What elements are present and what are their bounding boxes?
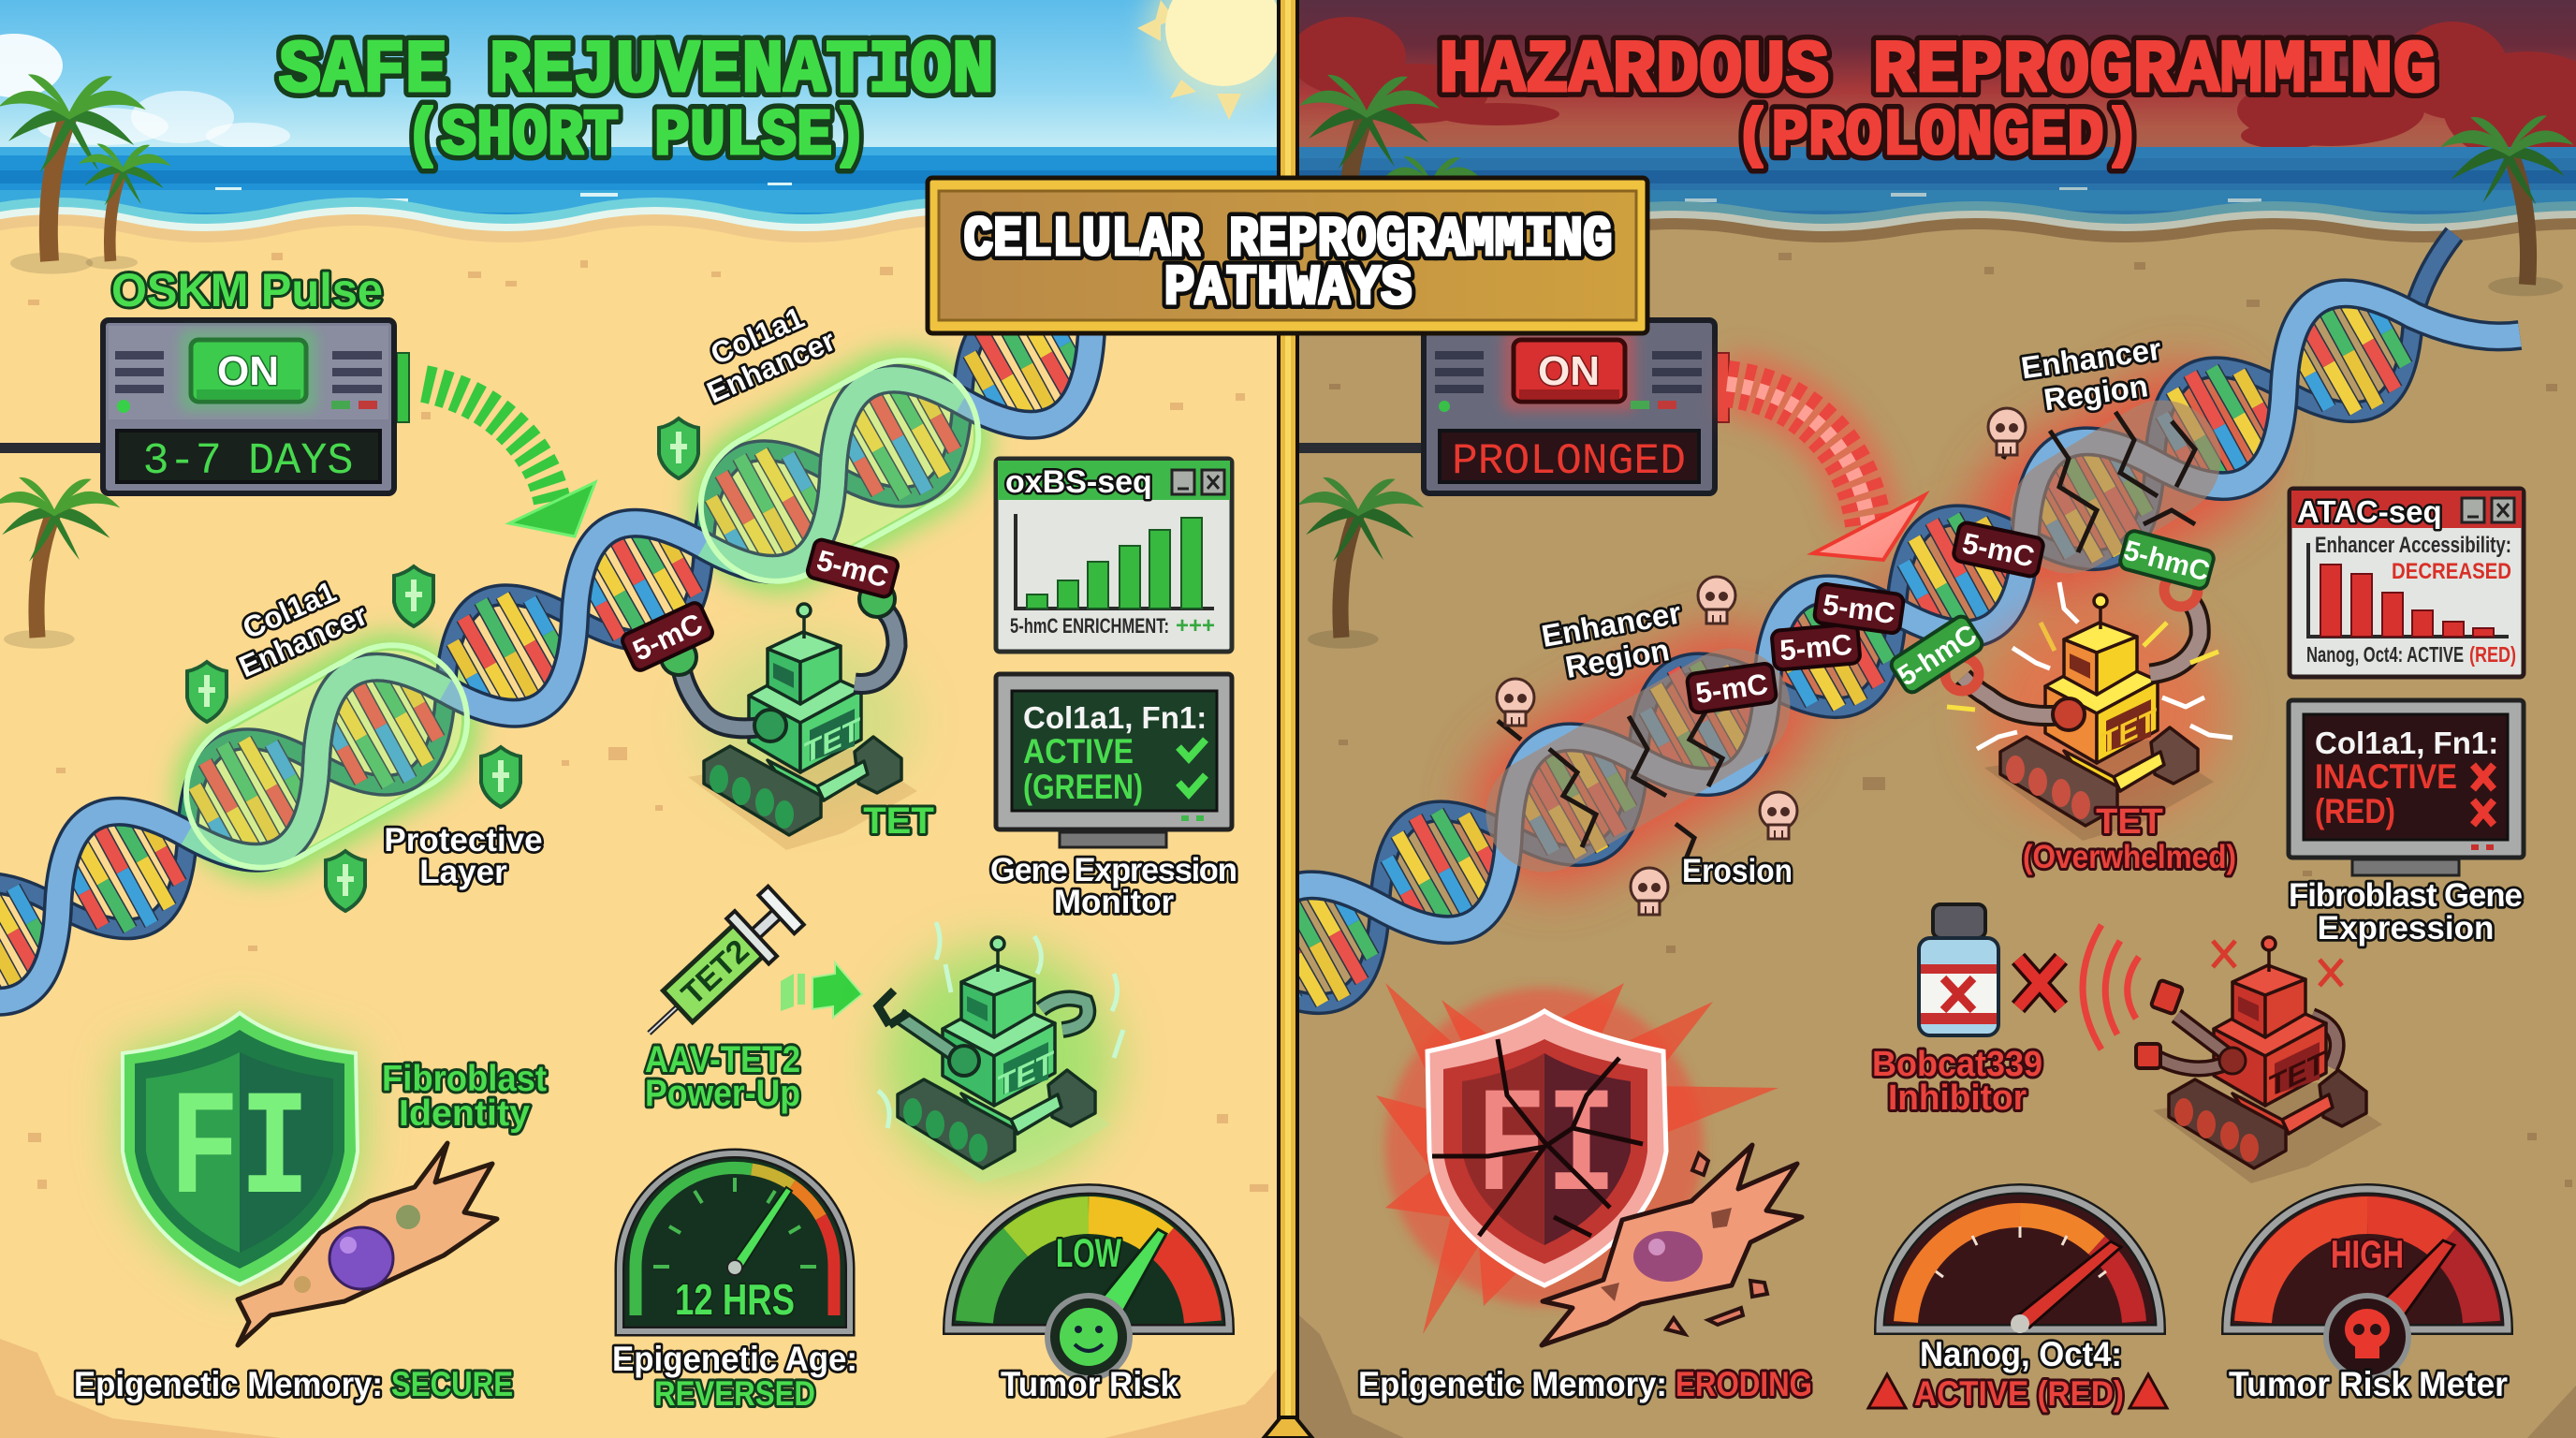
gauge: epigenetic age 12 hrs (620, 1153, 850, 1331)
bar chart: enhancer accessibility (2308, 543, 2509, 637)
label: Nanog Oct4 ACTIVE RED: ACTIVE (RED) (1914, 1374, 2124, 1413)
glow: erosion and stress (1554, 449, 2181, 807)
label: Epigenetic Memory ERODING: Epigenetic Memory: (1358, 1365, 1667, 1403)
title: hazardous reprogramming: (PROLONGED) (1734, 100, 2141, 174)
icon: broken fibroblast identity shield: FI (1476, 1064, 1617, 1235)
label: Epigenetic Age REVERSED (612, 1340, 857, 1413)
arrow: green power-up (781, 962, 862, 1018)
tag: 5-mC left: 5-mC (628, 607, 708, 668)
icon: Bobcat339 bottle (1919, 904, 1998, 1035)
banner: cellular reprogramming pathways (928, 178, 1647, 333)
label: Fibroblast Identity: Fibroblast (382, 1059, 547, 1099)
tag: 5-mC stack 4: 5-mC (1959, 526, 2037, 574)
button: ON: ON (217, 348, 279, 394)
icon: fibroblast identity shield: FI (169, 1067, 310, 1238)
label: Col1a1 Enhancer upper: Col1a1 (706, 301, 809, 371)
label: Epigenetic Memory ERODING: ERODING (1676, 1365, 1812, 1403)
label: Col1a1 Enhancer lower: Enhancer (234, 597, 373, 683)
label: Enhancer Region lower: Enhancer (1539, 594, 1684, 653)
burst rays (1385, 988, 1704, 1306)
label: Bobcat339 Inhibitor: Bobcat339 (1872, 1045, 2042, 1084)
label: Fibroblast Identity: Identity (399, 1093, 530, 1134)
label: Enhancer Region lower (1539, 594, 1690, 687)
display: PROLONGED: PROLONGED (1452, 437, 1686, 486)
title: safe rejuvenation (279, 29, 994, 174)
label: Fibroblast Gene Expression (2289, 877, 2523, 946)
label: Epigenetic Memory SECURE: SECURE (391, 1365, 513, 1403)
icon: fibroblast identity shield (123, 1013, 358, 1284)
icon: healthy fibroblast cell (238, 1143, 497, 1345)
arm: left (681, 663, 770, 728)
icon: smiley (1047, 1296, 1130, 1378)
window: ATAC-seq chart (2290, 489, 2524, 677)
icon: palm tree upper left (1299, 75, 1440, 265)
centre divider (1264, 0, 1312, 1438)
icon: power cord left (0, 443, 103, 453)
label: Epigenetic Memory SECURE: Epigenetic Memory: (74, 1365, 383, 1403)
label: Col1a1 Enhancer lower (220, 566, 373, 683)
banner: cellular reprogramming pathways: CELLULAR REPROGRAMMING (964, 209, 1612, 272)
icon: AAV-TET2 syringe: TET2 (675, 933, 756, 1012)
button: ON red (1502, 330, 1636, 412)
label: Protective Layer: Layer (419, 854, 507, 890)
window: ATAC-seq chart: (RED) (2469, 642, 2516, 667)
tag: 5-mC stack 1: 5-mC (1693, 668, 1770, 710)
gauge: epigenetic age 12 hrs: 12 HRS (675, 1275, 795, 1324)
label: Col1a1 Enhancer upper (688, 292, 841, 409)
gauge: tumor risk high (2227, 1189, 2508, 1378)
robot: TET inhibited: TET (2269, 1044, 2326, 1105)
label: Enhancer Region upper: Enhancer (2019, 331, 2163, 385)
label: Protective Layer: Protective (384, 822, 543, 858)
title: safe rejuvenation: (SHORT PULSE) (405, 100, 868, 174)
monitor: fibroblast gene expression (2289, 700, 2524, 875)
glow: capsule halos (262, 435, 903, 793)
icon: warning triangle right (2130, 1374, 2167, 1408)
label: Fibroblast Identity (382, 1059, 547, 1134)
icon: palm tree lower (1297, 477, 1424, 649)
bar chart: 5-hmC enrichment (1016, 514, 1214, 609)
title: hazardous reprogramming (1439, 29, 2437, 174)
icons: small protective shields (187, 418, 698, 911)
arm: right (855, 610, 897, 683)
label: Enhancer Region upper: Region (2042, 368, 2150, 417)
gauge: tumor risk low (948, 1189, 1229, 1378)
label: OSKM Pulse: OSKM Pulse (111, 264, 383, 316)
device: prolonged timer (1424, 320, 1729, 493)
capsule: protective layer upper (698, 358, 981, 584)
label: Erosion: Erosion (1682, 853, 1793, 889)
icon: palm tree 1 (0, 74, 146, 274)
panel: hazardous reprogramming beach background (1290, 0, 2576, 1438)
label: TET Overwhelmed: TET (2096, 802, 2163, 842)
icon: palm tree small (1384, 156, 1483, 289)
icon: power cord right (1299, 443, 1424, 453)
label: Protective Layer (384, 822, 543, 890)
monitor: gene expression (996, 674, 1232, 847)
icon: sun (1137, 0, 1300, 120)
arrow: green pulse (424, 384, 595, 536)
tag: 5-mC right: 5-mC (813, 544, 892, 594)
window: ATAC-seq chart: Enhancer Accessibility: (2315, 533, 2511, 558)
label: Col1a1 Enhancer lower: Col1a1 (238, 575, 341, 645)
title: safe rejuvenation: SAFE REJUVENATION (279, 29, 994, 114)
label: AAV-TET2 Power-Up: AAV-TET2 (645, 1039, 800, 1080)
button: ON (180, 330, 317, 412)
window: ATAC-seq chart: ATAC-seq (2297, 494, 2442, 529)
capsule: protective layer lower (183, 642, 470, 871)
icon: broken fibroblast identity shield (1376, 983, 1778, 1334)
label: Epigenetic Age REVERSED: Epigenetic Age: (612, 1340, 857, 1378)
label: Nanog Oct4 ACTIVE RED: Nanog, Oct4: (1920, 1335, 2122, 1373)
icon: inhibition waves (2083, 925, 2139, 1049)
label: Gene Expression Monitor (990, 852, 1237, 920)
gauge: tumor risk high: HIGH (2331, 1232, 2404, 1276)
label: Nanog Oct4 ACTIVE RED (1868, 1335, 2167, 1413)
window: ATAC-seq chart: DECREASED (2392, 559, 2511, 584)
window: oxBS-seq chart: +++ (1176, 613, 1215, 638)
icons: skulls (1497, 408, 2026, 915)
erosion overlay lower (1498, 674, 1732, 861)
title: hazardous reprogramming: HAZARDOUS REPROGRAMMING (1439, 29, 2437, 114)
tag: 5-mC stack 2: 5-mC (1778, 628, 1853, 667)
tag: 5-hmC right: 5-hmC (2120, 535, 2213, 587)
tag: 5-hmC left: 5-hmC (1893, 619, 1983, 693)
icon: eroding fibroblast cell (1542, 1145, 1802, 1345)
display: 3-7 days: 3-7 DAYS (142, 437, 354, 487)
window: ATAC-seq chart: Nanog, Oct4: ACTIVE (2306, 642, 2464, 667)
label: Fibroblast Gene Expression: Expression (2318, 910, 2494, 946)
icon: AAV-TET2 syringe (628, 883, 807, 1056)
icon: red clouds (1290, 17, 2576, 164)
panel: safe rejuvenation beach background (0, 0, 1329, 1438)
robot: TET powered up (878, 922, 1123, 1183)
button: ON red: ON (1538, 348, 1600, 394)
robot: TET overwhelmed: TET (2100, 701, 2158, 762)
monitor: fibroblast gene expression: (RED) (2315, 792, 2395, 830)
icon: warning triangle left (1868, 1374, 1906, 1408)
capsule interiors (262, 435, 903, 793)
chart: right DNA helix with erosion (1251, 234, 2520, 1004)
monitor: gene expression: (GREEN) (1023, 768, 1143, 806)
cracks (1432, 1039, 1643, 1236)
robot: TET overwhelmed (1945, 573, 2232, 841)
label: Enhancer Region lower: Region (1562, 632, 1672, 684)
tag: 5-mC stack 3: 5-mC (1821, 588, 1897, 630)
label: TET: TET (863, 800, 934, 842)
robot: TET inhibited (2136, 937, 2382, 1183)
icon: clouds (0, 34, 290, 149)
monitor: fibroblast gene expression: Col1a1, Fn1: (2315, 726, 2498, 760)
label: Bobcat339 Inhibitor: Inhibitor (1888, 1078, 2027, 1118)
robot: TET green: TET (804, 711, 861, 771)
gauge: Nanog Oct4 (1880, 1189, 2160, 1333)
icon: palm tree 3 (0, 477, 120, 649)
device: OSKM pulse timer (103, 320, 409, 493)
gauge: tumor risk low: LOW (1056, 1231, 1121, 1276)
label: Col1a1 Enhancer upper: Enhancer (702, 323, 841, 409)
sparks (1947, 582, 2232, 749)
label: TET Overwhelmed: (Overwhelmed) (2023, 839, 2236, 875)
robot: TET green (661, 581, 917, 850)
label: Epigenetic Age REVERSED: REVERSED (654, 1374, 815, 1413)
robot: TET powered up: TET (998, 1044, 1055, 1105)
icon: palm tree far right (2440, 115, 2573, 296)
label: AAV-TET2 Power-Up: Power-Up (645, 1073, 800, 1114)
label: Tumor Risk Meter: Tumor Risk Meter (2229, 1365, 2508, 1403)
label: Gene Expression Monitor: Gene Expression (990, 852, 1237, 888)
monitor: fibroblast gene expression: INACTIVE (2315, 757, 2457, 796)
banner: cellular reprogramming pathways: PATHWAYS (1164, 257, 1412, 321)
icon: palm tree 2 (79, 144, 171, 270)
label: Tumor Risk: Tumor Risk (1001, 1365, 1178, 1403)
window: oxBS-seq chart: 5-hmC ENRICHMENT: (1010, 614, 1169, 638)
label: Fibroblast Gene Expression: Fibroblast Gene (2289, 877, 2523, 914)
monitor: gene expression: Col1a1, Fn1: (1023, 700, 1207, 735)
label: AAV-TET2 Power-Up (645, 1039, 800, 1114)
label: Bobcat339 Inhibitor (1872, 1045, 2042, 1118)
label: Gene Expression Monitor: Monitor (1054, 884, 1175, 920)
icon: skull dial (2326, 1296, 2408, 1378)
label: TET Overwhelmed (2023, 802, 2236, 875)
arrow: red prolonged (1727, 384, 1925, 560)
label: Enhancer Region upper (2019, 331, 2168, 419)
icon: red X (2018, 959, 2061, 1007)
window: oxBS-seq chart: oxBS-seq (1005, 464, 1152, 500)
erosion overlay upper (2003, 412, 2195, 552)
window: oxBS-seq chart (996, 459, 1232, 652)
monitor: gene expression: ACTIVE (1023, 732, 1134, 770)
chart: left DNA helix with protective capsules (0, 306, 1091, 1002)
